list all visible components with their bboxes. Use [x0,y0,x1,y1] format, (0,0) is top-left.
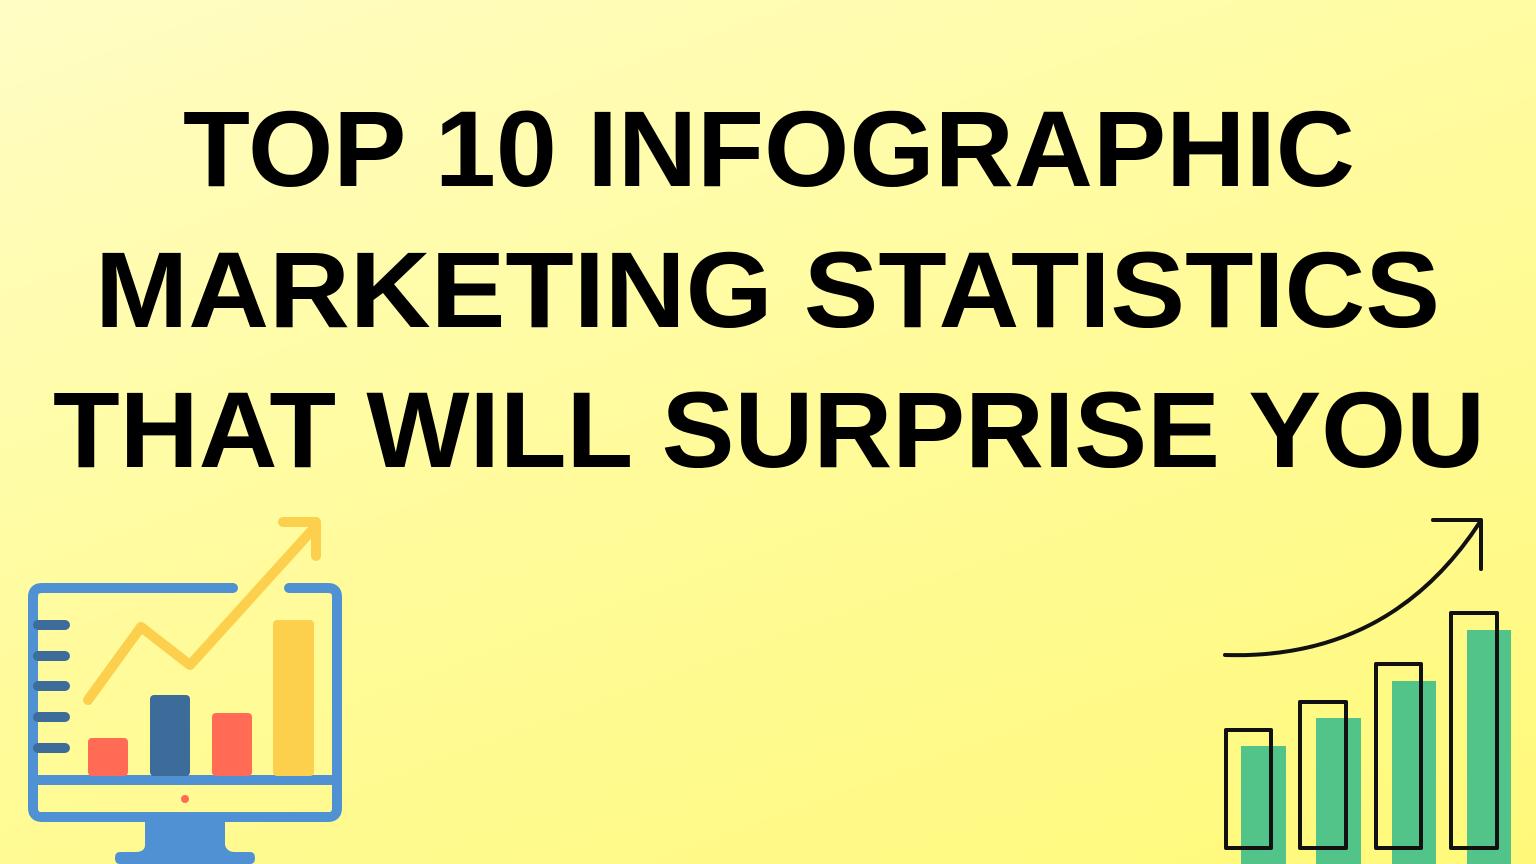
title [53,88,1485,490]
title: MARKETING STATISTICS [95,229,1440,350]
title: THAT WILL SURPRISE YOU [53,369,1485,490]
icon: growth bars [1225,520,1511,864]
icon: monitor with chart [33,522,337,864]
title: TOP 10 INFOGRAPHIC [183,88,1355,209]
